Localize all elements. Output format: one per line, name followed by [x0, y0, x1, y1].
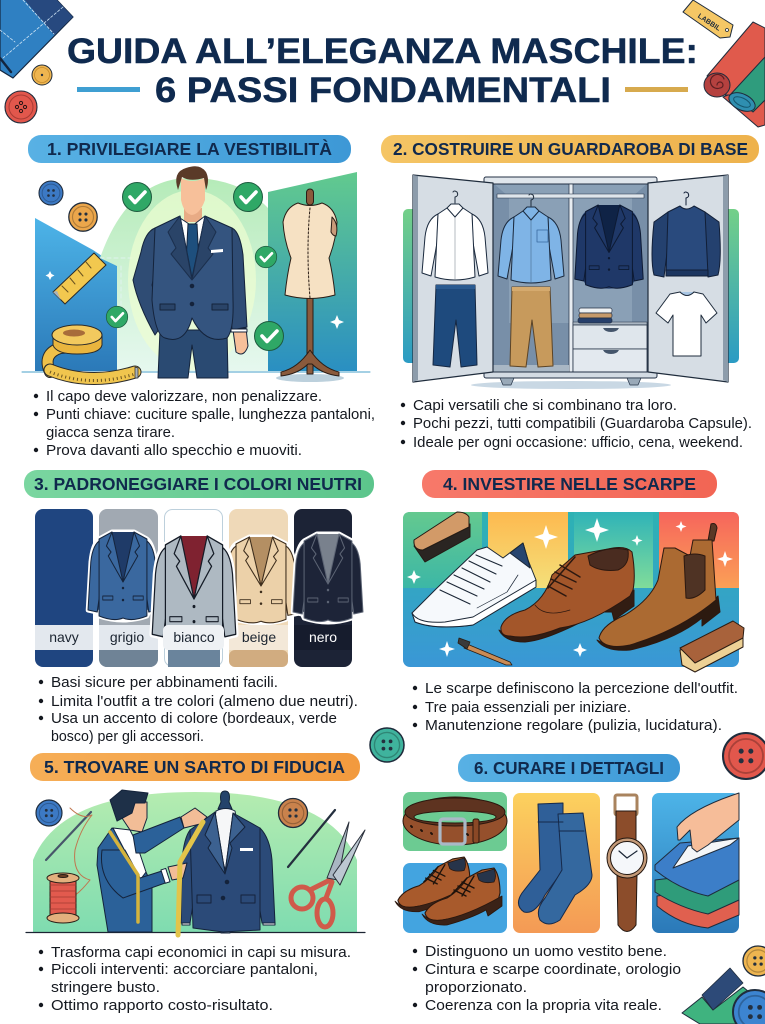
text block 1 — [34, 389, 375, 459]
panel 4: scarpe — [403, 470, 744, 734]
heading 2 — [381, 135, 759, 163]
heading 2: 2. COSTRUIRE UN GUARDAROBA DI BASE — [393, 139, 748, 159]
icon: dark brush — [414, 512, 470, 562]
garment: navy blazer — [575, 205, 643, 289]
icon: scissors — [291, 822, 365, 927]
text block 1: Il capo deve valorizzare, non penalizzare. — [46, 389, 322, 405]
text block 5: Trasforma capi economici in capi su misura. — [51, 945, 351, 961]
icon: checkmarks — [106, 182, 284, 350]
text block 3: Basi sicure per abbinamenti facili. — [51, 675, 278, 691]
text block 5: Ottimo rapporto costo-risultato. — [51, 998, 273, 1014]
icon: belt — [403, 797, 507, 845]
heading 4: 4. INVESTIRE NELLE SCARPE — [443, 474, 696, 494]
garment: folded stack — [578, 308, 612, 323]
icon: ruler — [53, 253, 106, 304]
decoration: red button — [5, 91, 37, 123]
garment: blue shirt — [498, 194, 564, 283]
decoration: label tag: LABBIL — [696, 13, 722, 33]
decoration: label tag — [683, 0, 733, 38]
heading 1 — [28, 135, 351, 163]
panel 6: dettagli — [395, 754, 739, 1014]
icon: orange button — [69, 203, 97, 231]
icon: blue button — [39, 181, 63, 205]
text block 3: Usa un accento di colore (bordeaux, verde — [51, 711, 337, 727]
illustration background — [22, 172, 370, 372]
icon: folded pocket squares — [655, 838, 739, 928]
heading 1: 1. PRIVILEGIARE LA VESTIBILITÀ — [47, 138, 332, 159]
color labels: navy — [49, 629, 79, 645]
icon: light brush — [680, 621, 744, 672]
icon: pair of shoes — [395, 857, 502, 925]
icon: watch — [607, 795, 647, 932]
text block 3 — [39, 675, 358, 745]
icon: hand — [677, 793, 739, 852]
panel 3: colori neutri — [24, 470, 374, 745]
text block 2: Ideale per ogni occasione: ufficio, cena, weekend. — [413, 435, 743, 451]
jacket beige — [225, 537, 297, 623]
icon: thread spool — [47, 873, 79, 923]
decoration: red button large — [723, 733, 765, 779]
icon: dress form mannequin — [276, 189, 344, 382]
text block 5: Piccoli interventi: accorciare pantaloni, — [51, 962, 318, 978]
garment: chinos — [510, 287, 553, 367]
icon: brogue shoe — [499, 548, 634, 642]
text block 4: Manutenzione regolare (pulizia, lucidatura). — [425, 718, 722, 734]
title: GUIDA ALL’ELEGANZA MASCHILE: — [67, 32, 698, 71]
text block 1: giacca senza tirare. — [46, 425, 175, 441]
decoration: yellow button — [32, 65, 52, 85]
garment: jeans — [433, 285, 477, 367]
text block 3: Limita l'outfit a tre colori (almeno due neutri). — [51, 694, 358, 710]
decoration: denim fabric top-left — [0, 0, 73, 78]
heading 4 — [422, 470, 717, 498]
tiles — [403, 792, 739, 933]
text block 6: proporzionato. — [425, 980, 527, 996]
heading 3: 3. PADRONEGGIARE I COLORI NEUTRI — [34, 474, 362, 494]
text block 1: Prova davanti allo specchio e muoviti. — [46, 443, 302, 459]
figure: dress form with jacket — [181, 791, 275, 933]
jacket grey with burgundy sweater: bianco — [173, 629, 215, 645]
icon: blue button — [36, 800, 62, 826]
figure: man in suit — [128, 166, 256, 378]
text block 4: Tre paia essenziali per iniziare. — [425, 700, 631, 716]
panel 1: vestibilità — [22, 135, 375, 459]
swatches — [35, 509, 352, 667]
illustration background — [403, 512, 739, 667]
color labels: beige — [242, 629, 276, 645]
text block 2: Capi versatili che si combinano tra loro. — [413, 398, 677, 414]
icon: tape measure roll — [48, 325, 138, 381]
text block 1: Punti chiave: cuciture spalle, lunghezza pantaloni, — [46, 407, 375, 423]
garment: sweater — [652, 192, 720, 277]
text block 5: stringere busto. — [51, 980, 160, 996]
text block 6: Distinguono un uomo vestito bene. — [425, 944, 667, 960]
text block 6: Cintura e scarpe coordinate, orologio — [425, 962, 681, 978]
figure: tailor — [97, 790, 207, 935]
decoration: bottom-right sewing items — [682, 946, 765, 1024]
text block 4 — [413, 681, 738, 734]
icon: sneaker — [412, 543, 536, 627]
icon: small brush — [458, 638, 512, 665]
text block 5 — [39, 945, 351, 1014]
text block 6 — [413, 944, 681, 1014]
color labels: grigio — [110, 629, 144, 645]
garment: white t-shirt — [656, 292, 717, 356]
jacket blue — [88, 532, 158, 620]
icon: socks — [518, 803, 592, 924]
heading 5: 5. TROVARE UN SARTO DI FIDUCIA — [44, 757, 345, 777]
illustration background — [26, 792, 365, 932]
text block 4: Le scarpe definiscono la percezione dell'outfit. — [425, 681, 738, 697]
title: 6 PASSI FONDAMENTALI — [155, 71, 611, 110]
garment: white shirt — [422, 191, 488, 280]
text block 2: Pochi pezzi, tutti compatibili (Guardaroba Capsule). — [413, 416, 752, 432]
panel 5: sarto — [26, 753, 365, 1014]
icon: needle 2 — [288, 810, 335, 867]
heading 6 — [458, 754, 680, 782]
jacket grey with burgundy sweater — [152, 536, 236, 667]
illustration: wardrobe — [403, 175, 739, 389]
decoration: teal button — [370, 728, 404, 762]
icon: chelsea boot — [597, 524, 720, 650]
heading 3 — [24, 470, 374, 498]
heading 5 — [30, 753, 360, 781]
jacket black — [293, 534, 363, 622]
icon: needle and thread — [46, 808, 92, 898]
title — [67, 32, 698, 110]
heading 6: 6. CURARE I DETTAGLI — [474, 758, 664, 778]
decoration: fabric rolls — [704, 22, 765, 127]
icon: brown button — [278, 798, 308, 828]
text block 3: bosco) per gli accessori. — [51, 729, 204, 745]
text block 2 — [401, 398, 752, 451]
text block 6: Coerenza con la propria vita reale. — [425, 998, 662, 1014]
panel 2: guardaroba — [381, 135, 759, 451]
color labels: nero — [309, 629, 337, 645]
color labels — [35, 625, 352, 650]
